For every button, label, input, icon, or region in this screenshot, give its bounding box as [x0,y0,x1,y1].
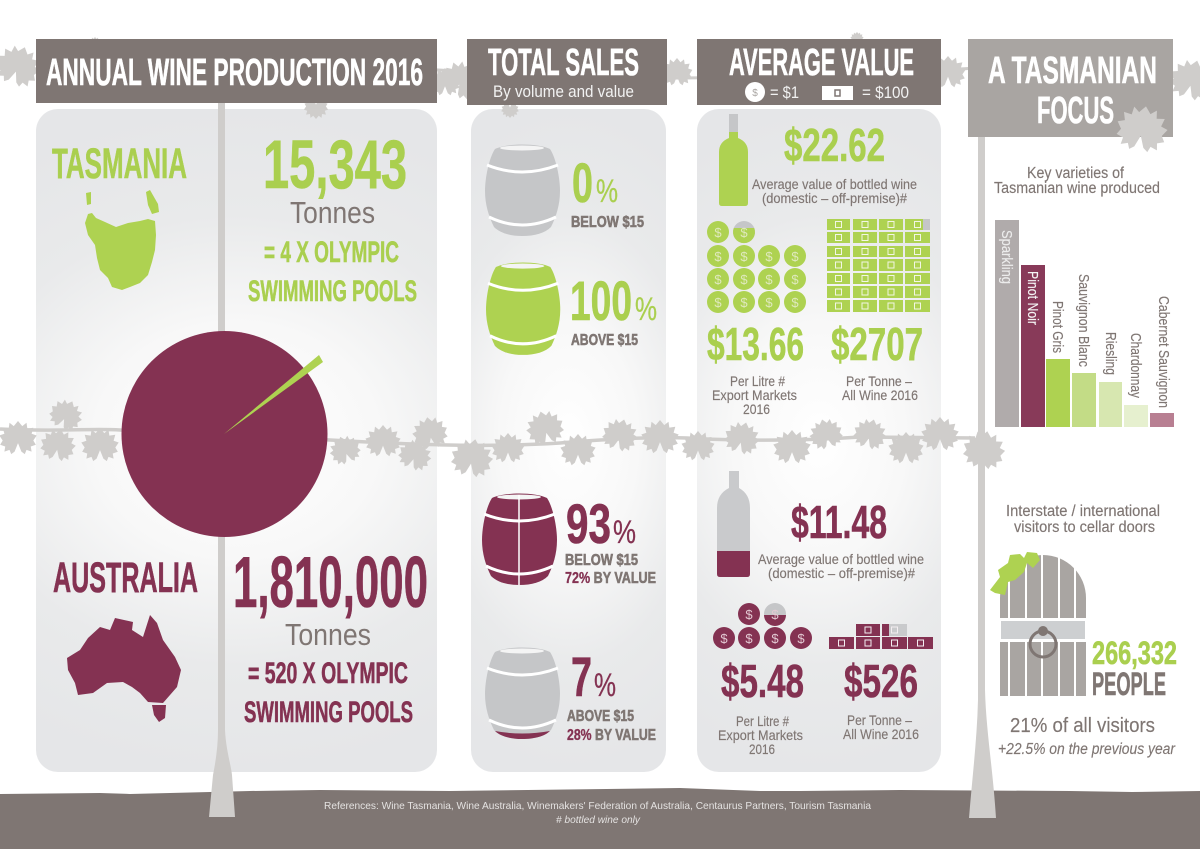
australia figures: 1,810,000 [233,543,428,623]
map: australia [67,615,181,722]
chart heading: key varieties: Key varieties of [1027,165,1125,182]
header: total sales: By volume and value [493,83,634,101]
tasmania sales: above $15 [486,263,657,355]
map: tasmania [85,190,159,290]
panel: annual wine production background [36,109,437,772]
australia average bottled value: $11.48 [791,496,887,548]
header: average value with legend: AVERAGE VALUE [729,42,914,84]
references: # bottled wine only [556,814,641,826]
coins: australia per litre [713,603,812,649]
australia sales: above $15: 28% BY VALUE [567,727,656,744]
header: average value with legend [697,39,941,105]
australia per tonne value: $526 [844,655,918,707]
australia per litre value [718,655,804,757]
tasmania sales: above $15: 100 [570,269,632,332]
coins: tasmania per litre: $ [714,249,722,264]
panel: total sales background [471,109,666,772]
coins: tasmania per litre: $ [714,225,722,240]
chart heading: key varieties [994,165,1160,197]
australia per litre value: Export Markets [718,727,803,743]
pie chart: Tasmania share of Australian production [122,331,328,537]
coins: tasmania per litre: $ [714,272,722,287]
australia figures [233,543,428,729]
coins: tasmania per litre: $ [791,249,799,264]
tasmania sales: below $15: BELOW $15 [571,214,644,231]
bar chart: key varieties [995,220,1174,427]
header: a tasmanian focus: FOCUS [1037,90,1114,132]
tasmania per tonne value: Per Tonne – [846,373,912,389]
tasmania sales: below $15 [485,144,644,236]
tasmania label: TASMANIA [52,140,187,188]
tasmania figures: = 4 X OLYMPIC [264,236,399,269]
icon: cellar door [990,550,1086,696]
header: total sales [467,39,667,105]
header: annual wine production [36,39,437,103]
visitors share: +22.5% on the previous year [998,741,1176,758]
tasmania sales: below $15: 0 [572,151,593,214]
australia sales: below $15: 93 [566,492,611,555]
header: average value with legend: = $100 [862,84,909,102]
australia sales: above $15: ABOVE $15 [567,708,634,725]
bar chart: key varieties: Riesling [1102,332,1119,375]
australia average bottled value: (domestic – off-premise)# [768,565,915,581]
icon: tasmanian wine bottle [719,114,748,206]
tasmania figures: 15,343 [263,126,407,203]
coins: tasmania per litre: $ [740,249,748,264]
tasmania average bottled value: $22.62 [784,119,885,171]
australia figures: = 520 X OLYMPIC [248,657,408,690]
header: average value with legend: $ [752,88,758,99]
australia average bottled value [758,496,924,581]
australia label: AUSTRALIA [53,554,198,602]
tasmania average bottled value [752,119,917,206]
header: total sales: TOTAL SALES [488,42,639,84]
header: annual wine production: ANNUAL WINE PRODUCTION 2016 [46,52,423,94]
coins: tasmania per litre: $ [765,295,773,310]
coins: tasmania per litre: $ [791,272,799,287]
coins: australia per litre: $ [720,631,728,646]
australia sales: below $15: % [613,514,636,550]
ground [0,788,1200,849]
australia per tonne value: Per Tonne – [847,712,912,728]
tasmania per litre value: Export Markets [712,387,797,403]
australia per litre value: 2016 [749,741,775,757]
vine trunk right [969,137,996,818]
australia per tonne value [843,655,919,742]
header: average value with legend: = $1 [770,84,799,102]
tasmania per tonne value: All Wine 2016 [842,387,918,403]
references: References: Wine Tasmania, Wine Australia, Winemakers' Federation of Australia, Centaurus Partners, Tourism Tasmania [324,800,871,812]
australia sales: above $15: % [594,667,616,703]
australia per litre value: $5.48 [721,655,804,707]
tasmania sales: below $15: % [596,173,618,209]
australia per tonne value: All Wine 2016 [843,726,919,742]
coins: tasmania per litre: $ [740,272,748,287]
australia sales: below $15 [482,492,656,587]
coins: tasmania per litre: $ [740,295,748,310]
visitors share [998,715,1176,758]
coins: australia per litre: $ [771,607,779,622]
icon: australian wine bottle [717,471,750,577]
bar chart: key varieties: Chardonnay [1127,333,1144,398]
australia average bottled value: Average value of bottled wine [758,551,924,567]
tasmania figures: SWIMMING POOLS [248,275,417,308]
tasmania figures: Tonnes [290,195,375,230]
tasmania per litre value: 2016 [743,401,770,417]
tasmania sales: above $15: % [635,291,657,327]
vine trunk left [209,103,235,817]
australia per litre value: Per Litre # [736,713,789,729]
bar chart: key varieties: Sparkling [998,230,1015,284]
coins: tasmania per litre [707,221,806,313]
australia sales: above $15 [485,645,656,744]
australia sales: above $15: 7 [571,645,592,708]
coins: australia per litre: $ [771,631,779,646]
coins: tasmania per litre: $ [714,295,722,310]
visitors heading: Interstate / international [1006,503,1160,520]
coins: tasmania per litre: $ [765,249,773,264]
panel: average value background [697,109,941,772]
visitors share: 21% of all visitors [1010,715,1155,737]
tasmania per litre value [707,318,804,417]
australia figures: SWIMMING POOLS [244,696,413,729]
chart heading: key varieties: Tasmanian wine produced [994,180,1160,197]
tasmania figures [248,126,417,308]
bar chart: key varieties: Sauvignon Blanc [1075,274,1092,367]
visitors figure [1092,635,1177,702]
coins: australia per litre: $ [745,607,753,622]
top vine [0,32,1200,105]
tasmania average bottled value: Average value of bottled wine [752,176,917,192]
visitors heading: visitors to cellar doors [1014,519,1155,536]
australia sales: below $15: 72% BY VALUE [565,570,656,587]
tasmania per tonne value: $2707 [831,318,923,370]
banknotes: australia per tonne [829,624,933,649]
coins: tasmania per litre: $ [740,225,748,240]
bar chart: key varieties: Pinot Gris [1049,301,1066,353]
visitors heading [1006,503,1160,536]
bar chart: key varieties: Cabernet Sauvignon [1155,296,1172,408]
tasmania per litre value: Per Litre # [730,373,785,389]
references [324,800,871,826]
coins: australia per litre: $ [797,631,805,646]
tasmania per litre value: $13.66 [707,318,804,370]
tasmania per tonne value [831,318,923,403]
coins: tasmania per litre: $ [765,272,773,287]
coins: tasmania per litre: $ [791,295,799,310]
coins: australia per litre: $ [745,631,753,646]
australia sales: below $15: BELOW $15 [565,552,638,569]
middle vine [0,98,1008,479]
bar chart: key varieties: Pinot Noir [1024,271,1041,325]
tasmania average bottled value: (domestic – off-premise)# [762,190,907,206]
tasmania sales: above $15: ABOVE $15 [571,332,638,349]
australia figures: Tonnes [285,617,371,652]
header: a tasmanian focus [968,39,1173,155]
banknotes: tasmania per tonne [827,219,930,312]
